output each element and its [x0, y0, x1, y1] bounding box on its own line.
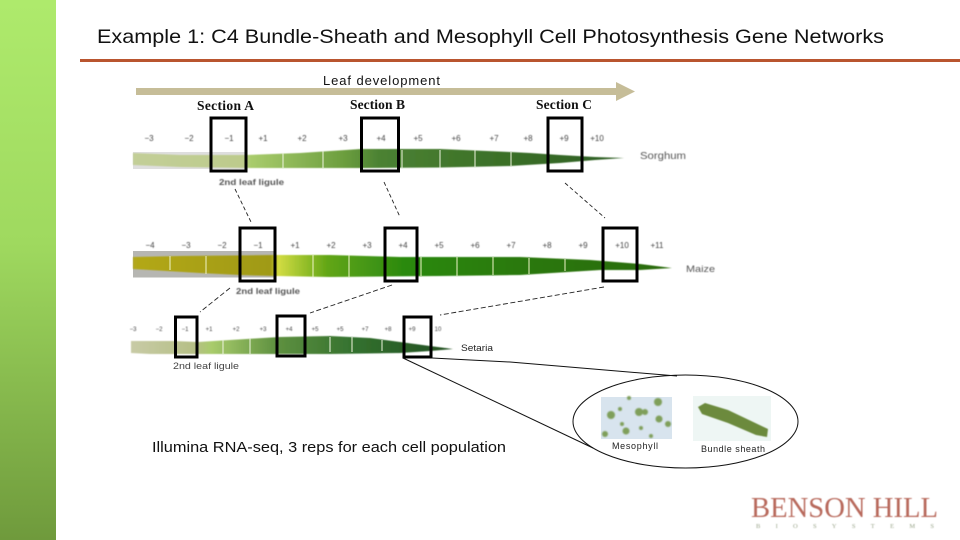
maize position numbers: +7 [506, 241, 516, 250]
maize position numbers: +5 [434, 241, 444, 250]
maize position numbers: +11 [651, 241, 664, 250]
maize section boxes [240, 228, 637, 281]
mesophyll label: Mesophyll [612, 441, 658, 451]
section labels: Section C [536, 97, 592, 112]
section labels: Section A [197, 98, 254, 113]
setaria position numbers: +4 [286, 327, 293, 333]
setaria position numbers: +5 [312, 327, 319, 333]
bundle sheath label: Bundle sheath [701, 444, 765, 454]
sorghum leaf background [133, 152, 246, 169]
maize position numbers [145, 241, 664, 250]
sorghum segment dividers [283, 150, 511, 168]
maize position numbers: +3 [362, 241, 372, 250]
bundle sheath micrograph [693, 396, 771, 441]
setaria position numbers: +7 [362, 327, 369, 333]
sorghum position numbers: +3 [338, 134, 348, 143]
sorghum position numbers: −2 [184, 134, 194, 143]
maize position numbers: −2 [217, 241, 227, 250]
maize segment dividers [170, 255, 565, 277]
maize leaf panel [133, 228, 715, 296]
arrow: leaf development direction [136, 82, 635, 101]
method text: Illumina RNA-seq, 3 reps for each cell population [152, 439, 506, 456]
maize position numbers: +2 [326, 241, 336, 250]
title: Example 1: C4 Bundle-Sheath and Mesophyll Cell Photosynthesis Gene Networks [97, 26, 884, 48]
setaria section boxes [176, 316, 431, 357]
setaria leaf blade [131, 336, 453, 354]
maize position numbers: +6 [470, 241, 480, 250]
dashed connectors maize to setaria [200, 285, 604, 315]
sorghum position numbers: −1 [224, 134, 234, 143]
title underline [80, 59, 960, 62]
maize leaf blade [133, 255, 672, 277]
setaria position numbers: +1 [206, 327, 213, 333]
maize label: Maize [686, 264, 715, 275]
mesophyll micrograph [601, 396, 672, 439]
setaria segment dividers [223, 337, 382, 354]
setaria position numbers: +8 [385, 327, 392, 333]
setaria ligule label: 2nd leaf ligule [173, 361, 239, 372]
sorghum position numbers: +4 [376, 134, 386, 143]
sorghum section boxes [211, 118, 582, 171]
setaria label: Setaria [461, 343, 494, 354]
sorghum label: Sorghum [640, 151, 686, 162]
solid zoom lines to ellipse [403, 358, 677, 448]
setaria position numbers: 10 [435, 327, 442, 333]
sorghum position numbers: +6 [451, 134, 461, 143]
sorghum position numbers: +2 [297, 134, 307, 143]
dashed connectors sorghum to maize [235, 182, 605, 222]
maize position numbers: +10 [615, 241, 629, 250]
section labels [197, 97, 592, 113]
maize position numbers: +4 [398, 241, 408, 250]
setaria position numbers: −3 [130, 327, 137, 333]
logo: Benson Hill Biosystems: BENSON HILL [751, 492, 938, 524]
logo: Benson Hill Biosystems: BIOSYSTEMS [756, 523, 934, 530]
sorghum position numbers: −3 [144, 134, 154, 143]
maize position numbers: +1 [290, 241, 300, 250]
cell population ellipse [573, 375, 798, 468]
setaria position numbers: +9 [409, 327, 416, 333]
heading: leaf development: Leaf development [323, 73, 440, 88]
sorghum ligule label: 2nd leaf ligule [219, 178, 285, 187]
sorghum position numbers: +5 [413, 134, 423, 143]
setaria position numbers: −2 [156, 327, 163, 333]
setaria position numbers: +3 [260, 327, 267, 333]
sorghum position numbers [144, 134, 604, 143]
sorghum position numbers: +7 [489, 134, 499, 143]
maize position numbers: −3 [181, 241, 191, 250]
sorghum position numbers: +10 [590, 134, 604, 143]
setaria leaf panel [130, 316, 494, 372]
setaria position numbers [130, 327, 442, 333]
maize position numbers: −4 [145, 241, 155, 250]
maize ligule label: 2nd leaf ligule [236, 287, 301, 296]
setaria position numbers: −1 [182, 327, 189, 333]
sorghum leaf panel [133, 118, 686, 187]
maize position numbers: −1 [253, 241, 263, 250]
maize leaf background [133, 251, 276, 278]
sorghum position numbers: +1 [258, 134, 268, 143]
sorghum position numbers: +8 [523, 134, 533, 143]
maize position numbers: +8 [542, 241, 552, 250]
section labels: Section B [350, 97, 405, 112]
sorghum position numbers: +9 [559, 134, 569, 143]
sorghum leaf blade [133, 149, 624, 168]
setaria position numbers: +5 [337, 327, 344, 333]
maize position numbers: +9 [578, 241, 588, 250]
setaria position numbers: +2 [233, 327, 240, 333]
green sidebar [0, 0, 56, 540]
